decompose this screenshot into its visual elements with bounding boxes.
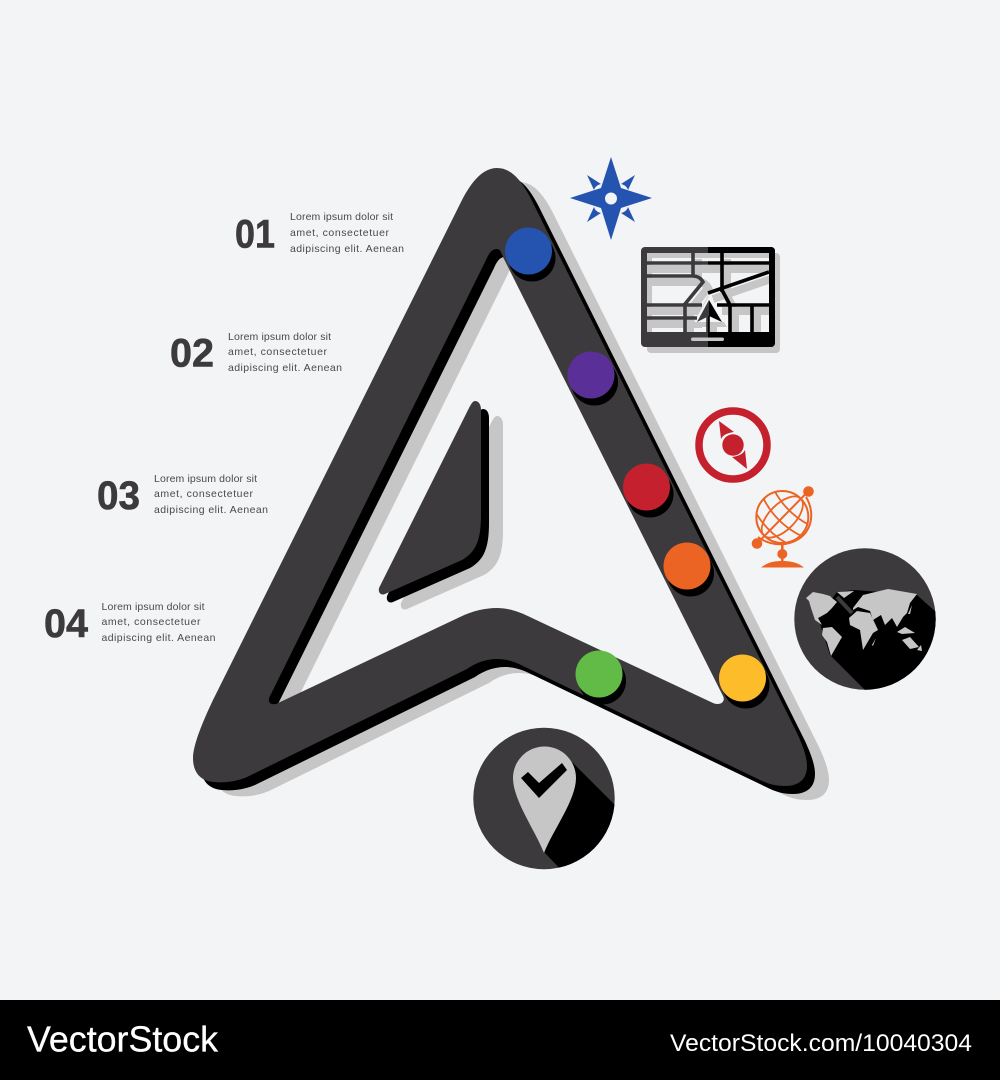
footer bar [0,1000,1000,1080]
step 04: adipiscing elit. Aenean [102,632,216,644]
marker dot: yellow [719,654,770,708]
step 04: 04 [44,602,89,646]
step 04: amet, consectetuer [102,616,201,628]
step 02: Lorem ipsum dolor sit [228,331,331,343]
step 01 [235,211,404,256]
marker dot: green [576,650,626,704]
step 04: Lorem ipsum dolor sit [102,601,205,613]
step 02: amet, consectetuer [228,346,328,358]
marker dot: purple [568,352,618,406]
step 03 [97,473,268,518]
step 02: 02 [170,332,214,376]
inner arrow wedge with shadows [379,401,503,609]
step 01: amet, consectetuer [290,227,390,239]
footer bar: VectorStock [27,1018,219,1060]
icon: orange globe [752,486,814,568]
step 02 [170,331,342,376]
icon: compass star [570,157,652,240]
step 03: amet, consectetuer [154,488,254,500]
icon: red compass [699,411,767,479]
step 03: Lorem ipsum dolor sit [154,473,257,485]
marker dot: orange [664,542,714,596]
icon: location pin circle [473,728,620,875]
icon: world map circle [794,548,937,700]
marker dot: blue [505,228,556,282]
step 04 [44,601,216,646]
step 03: adipiscing elit. Aenean [154,504,268,516]
step 01: Lorem ipsum dolor sit [290,211,393,223]
step 03: 03 [97,474,140,518]
icon: GPS map device [640,247,780,353]
marker dot: red [623,464,674,518]
navigation arrow shape with shadows [193,168,829,800]
step 02: adipiscing elit. Aenean [228,362,342,374]
step 01: 01 [235,212,275,256]
footer bar: VectorStock.com/10040304 [670,1030,972,1057]
step 01: adipiscing elit. Aenean [290,243,404,255]
